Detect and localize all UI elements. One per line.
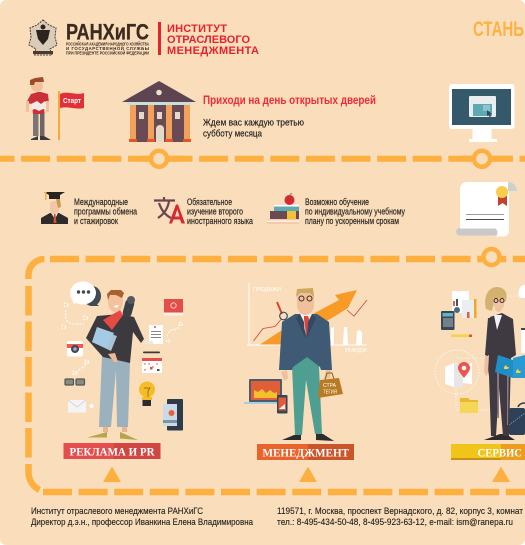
icon: glasses (65, 379, 84, 385)
description: Ждем вас каждую третью (203, 118, 304, 128)
icon: envelope (68, 400, 86, 412)
character: service specialist (484, 287, 525, 440)
flag label: Старт (63, 98, 82, 105)
footer: institute and director (31, 506, 254, 528)
icon: cloud (518, 285, 525, 298)
dashed career frame (28, 249, 525, 492)
RANEPA wordmark (66, 20, 149, 56)
icon: university building (122, 81, 196, 142)
marker: right ring (474, 151, 490, 167)
description: Международные (74, 197, 128, 207)
icon: side document (521, 328, 525, 353)
icon: smartphone profile (163, 399, 183, 430)
icon: magnifier (277, 302, 287, 320)
icon: crest (29, 20, 57, 55)
logo: RANEPA and institute (29, 20, 259, 57)
footer: institute and director: Институт отраслевого менеджмента РАНХиГС (31, 506, 203, 517)
top dashed path (0, 151, 525, 167)
icon: map and pin (445, 362, 472, 388)
RANEPA wordmark: ПРИ ПРЕЗИДЕНТЕ РОССИЙСКОЙ ФЕДЕРАЦИИ (66, 50, 149, 56)
institute name: ОТРАСЛЕВОГО (167, 34, 250, 46)
institute name (167, 23, 259, 57)
footer: institute and director: Директор д.э.н., профессор Иванкина Елена Владимировна (31, 517, 254, 528)
description: Возможно обучение (305, 197, 369, 207)
label: service (451, 444, 525, 460)
description: по индивидуальному учебному (305, 206, 405, 216)
career: management (244, 283, 367, 482)
icon: video screen (164, 299, 183, 316)
icon: strategy bag: ТЕГИЯ (323, 390, 337, 396)
icon: strategy bag (318, 373, 343, 398)
career: advertising and PR (62, 282, 183, 482)
icon: pen (143, 352, 160, 353)
heading: Приходи на день открытых дверей (203, 93, 376, 107)
description: и стажировок (74, 216, 118, 226)
RANEPA wordmark: И ГОСУДАРСТВЕННОЙ СЛУЖБЫ (66, 46, 149, 51)
dotted connectors (435, 296, 525, 410)
RANEPA wordmark: РОССИЙСКАЯ АКАДЕМИЯ НАРОДНОГО ХОЗЯЙСТВА (66, 42, 149, 46)
red divider (158, 22, 161, 55)
icon: camera (67, 341, 83, 356)
arrow: up (492, 466, 510, 482)
footer: contacts (277, 506, 524, 528)
icon: translate (154, 197, 185, 224)
label: advertising and PR: РЕКЛАМА И PR (70, 446, 155, 458)
icon: pencil (447, 334, 472, 337)
axis label: image: ИМИДЖ (345, 348, 367, 354)
description: Обязательное (187, 197, 232, 207)
flag pole (58, 91, 60, 140)
flag (60, 93, 84, 109)
icon: monitor (449, 84, 514, 142)
icon: calendar (142, 358, 162, 373)
benefit: second language (154, 197, 253, 226)
icon: speech bubble (70, 282, 101, 306)
description: плану по ускоренным срокам (305, 216, 399, 226)
icon: documents and charts (452, 291, 476, 318)
label: management: МЕНЕДЖМЕНТ (262, 446, 349, 460)
start figure with flag (26, 77, 84, 140)
description: иностранного языка (187, 216, 253, 226)
description (203, 118, 304, 140)
icon: folder (460, 398, 478, 413)
arrow: growth (260, 290, 357, 344)
character: PR specialist (86, 290, 144, 440)
description: программы обмена (74, 206, 137, 216)
icon: certificate (456, 182, 517, 236)
axis label: sales: ПРОДАЖИ (253, 287, 281, 293)
chart: growth (247, 283, 367, 354)
marker: frame ring (484, 249, 500, 265)
arrow: up (103, 466, 121, 482)
icon: laptop and phone (244, 379, 288, 414)
career: service (435, 285, 525, 482)
open day text block (203, 93, 376, 140)
description: субботу месяца (203, 128, 263, 140)
description (74, 197, 137, 226)
institute name: МЕНЕДЖМЕНТА (167, 45, 259, 57)
icon: light bulb (139, 382, 155, 406)
dotted connectors (62, 303, 182, 408)
arrow: up (299, 466, 317, 482)
description: изучение второго (187, 206, 243, 216)
icon: calculator (441, 311, 454, 330)
icon: blue folder (495, 355, 525, 378)
marker: left ring (151, 151, 167, 167)
label: advertising and PR (64, 443, 160, 459)
description (187, 197, 253, 226)
institute name: ИНСТИТУТ (167, 23, 227, 35)
benefit: individual plan (267, 193, 405, 226)
icon: document (145, 325, 163, 344)
icon: briefcase (509, 403, 525, 435)
character: manager (279, 288, 343, 441)
icon: graduate (41, 192, 68, 224)
icon: strategy bag: СТРА (323, 383, 336, 389)
RANEPA wordmark: РАНХиГС (66, 20, 149, 44)
icon: books and apple (267, 193, 299, 224)
benefit: international programs (41, 192, 137, 226)
icon: boy (26, 77, 51, 140)
description (305, 197, 405, 226)
